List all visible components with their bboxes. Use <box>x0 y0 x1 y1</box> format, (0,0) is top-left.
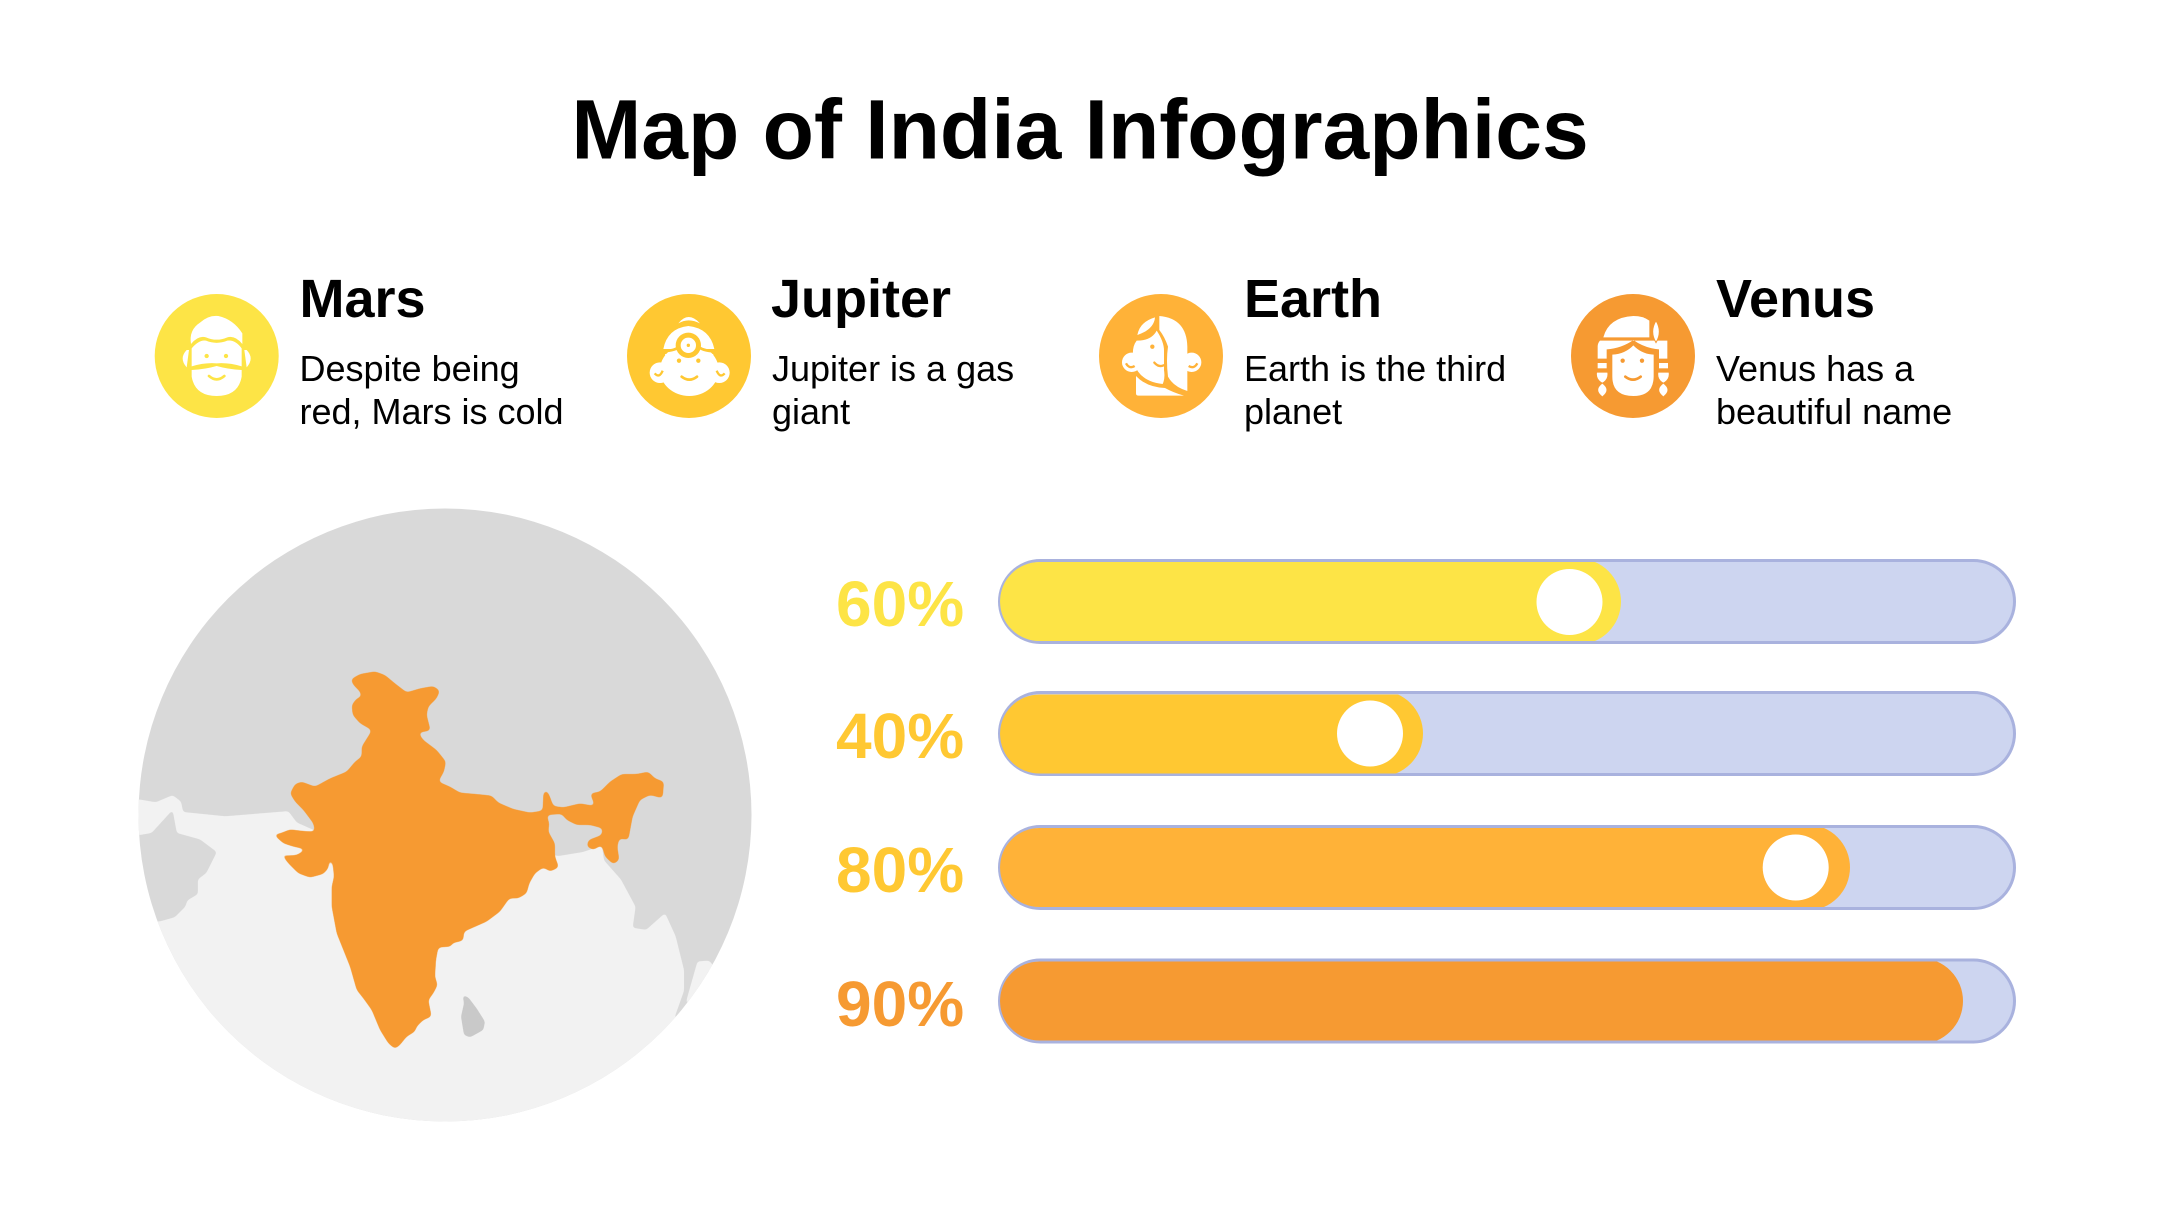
fill <box>1000 824 1850 910</box>
heading: Mars: Mars <box>300 269 426 329</box>
bar row: 80% <box>836 824 2014 910</box>
description: Venus: beautiful name <box>1716 391 1952 432</box>
description: Venus: Venus has a <box>1716 348 1915 389</box>
panel: progress bars <box>836 558 2014 1044</box>
value: 90%: 90% <box>836 968 964 1040</box>
track <box>1000 692 2014 774</box>
fill <box>1000 690 1423 776</box>
India <box>273 671 664 1049</box>
knob <box>1536 569 1602 635</box>
track <box>1000 960 2014 1042</box>
fill <box>1000 958 1963 1044</box>
icon: man with moustache <box>155 294 279 418</box>
fill <box>1000 558 1621 644</box>
Sri Lanka <box>461 995 485 1037</box>
icon: woman in profile <box>1099 294 1223 418</box>
heading: Venus: Venus <box>1716 269 1875 329</box>
knob <box>1337 700 1403 766</box>
panel: Earth <box>1099 269 1506 432</box>
description: Earth: Earth is the third <box>1244 348 1506 389</box>
description: Jupiter: Jupiter is a gas <box>772 348 1014 389</box>
icon: face with flower headdress <box>627 294 751 418</box>
description: Mars: Despite being <box>300 348 520 389</box>
value: 60%: 60% <box>836 568 964 640</box>
panel: globe map of India <box>138 508 752 1122</box>
panel: Venus <box>1571 269 1952 432</box>
track <box>1000 560 2014 642</box>
value: 80%: 80% <box>836 834 964 906</box>
heading: Jupiter: Jupiter <box>771 269 951 329</box>
bar row: 90% <box>836 958 2014 1044</box>
description: Mars: red, Mars is cold <box>300 391 564 432</box>
track <box>1000 826 2014 908</box>
heading: Earth: Earth <box>1244 269 1382 329</box>
value: 40%: 40% <box>836 700 964 772</box>
globe land background <box>138 508 752 1122</box>
title: Map of India Infographics <box>571 82 1589 176</box>
bar row: 60% <box>836 558 2014 644</box>
icon: girl with braids and feather <box>1571 294 1695 418</box>
description: Jupiter: giant <box>772 391 850 432</box>
knob <box>1763 834 1829 900</box>
description: Earth: planet <box>1244 391 1342 432</box>
panel: Mars <box>155 269 564 432</box>
bar row: 40% <box>836 690 2014 776</box>
panel: Jupiter <box>627 269 1014 432</box>
ocean and neighbouring coastline <box>138 796 712 1122</box>
